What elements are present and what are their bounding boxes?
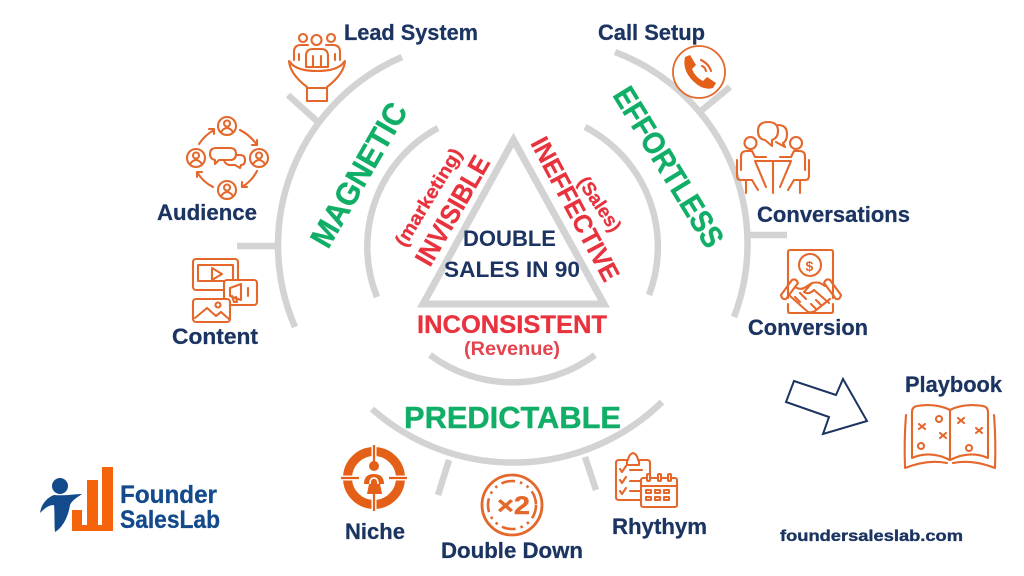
red label: inconsistent: INCONSISTENT	[417, 311, 607, 339]
red label: revenue: (Revenue)	[464, 339, 560, 360]
label: audience: Audience	[157, 200, 257, 225]
website url: foundersaleslab.com	[780, 528, 963, 545]
central triangle	[423, 140, 604, 304]
icon: lead funnel	[289, 34, 345, 101]
icon: double down	[482, 475, 542, 535]
inner arc: bottom	[430, 355, 595, 382]
logo: wordmark: Founder	[120, 481, 217, 509]
heading: effortless: EFFORTLESS	[606, 80, 731, 254]
center heading: SALES IN 90	[444, 257, 580, 282]
logo: wordmark: SalesLab	[120, 506, 220, 534]
red label: ineffective: INEFFECTIVE	[525, 132, 626, 286]
label: rhythym: Rhythym	[612, 514, 707, 539]
icon: double down: ×2	[497, 492, 530, 520]
label: double down: Double Down	[441, 538, 583, 563]
label: content: Content	[172, 324, 259, 349]
red label: sales: (Sales)	[573, 173, 625, 236]
inner arc: left	[367, 128, 438, 297]
icon: content	[193, 259, 257, 322]
logo: figure	[40, 478, 82, 532]
label: playbook: Playbook	[905, 372, 1003, 397]
logo: bars	[72, 467, 113, 531]
red label: marketing: (marketing)	[391, 145, 467, 251]
icon: conversations	[737, 122, 809, 193]
icon: playbook	[905, 405, 995, 468]
red label: invisible: INVISIBLE	[409, 150, 496, 271]
outer arc: magnetic	[237, 57, 402, 327]
label: conversations: Conversations	[757, 202, 910, 227]
icon: rhythm calendar	[616, 453, 677, 507]
outer arc: effortless	[615, 52, 787, 317]
label: niche: Niche	[345, 519, 405, 544]
icon: conversion handshake	[781, 250, 841, 313]
outer arc: predictable	[372, 402, 662, 495]
logo: founder saleslab	[40, 467, 220, 534]
label: lead system: Lead System	[344, 20, 478, 45]
center heading: DOUBLE	[463, 226, 556, 251]
label: conversion: Conversion	[748, 315, 868, 340]
arrow to playbook	[786, 379, 867, 434]
logo: wordmark	[120, 481, 220, 534]
icon: phone	[673, 46, 725, 98]
icon: audience loop	[187, 117, 268, 199]
inner arc: right	[585, 127, 658, 295]
heading: magnetic: MAGNETIC	[303, 96, 415, 254]
heading: predictable: PREDICTABLE	[404, 400, 621, 435]
icon: niche target	[340, 444, 408, 512]
icon: conversion handshake: $	[806, 258, 814, 274]
label: call setup: Call Setup	[598, 20, 705, 45]
center heading	[444, 226, 580, 282]
